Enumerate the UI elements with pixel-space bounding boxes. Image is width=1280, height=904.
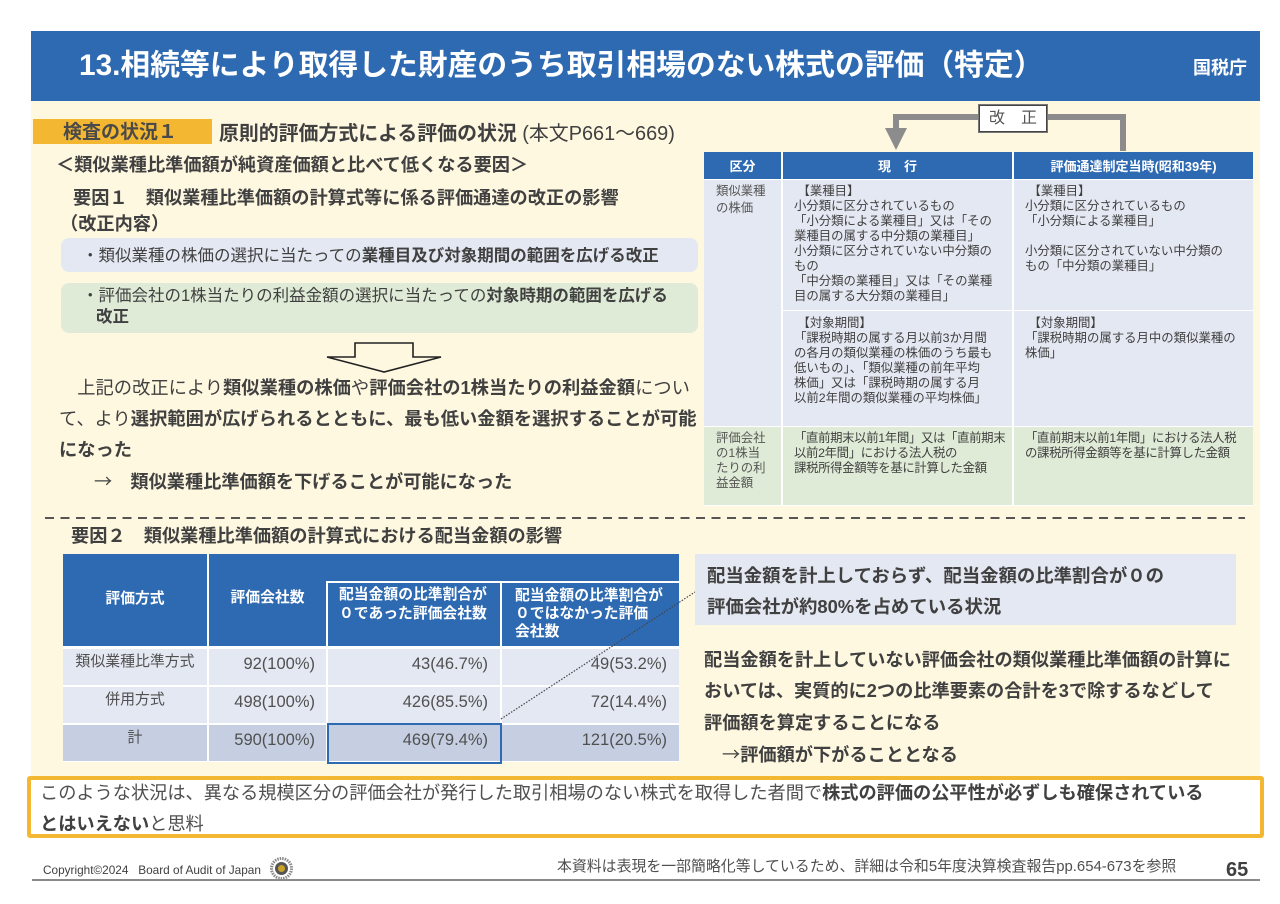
column header: category: 区分 xyxy=(729,159,756,174)
row: similar industry method: 92(100%) xyxy=(243,655,315,673)
explanation text: 評価額を算定することになる xyxy=(704,713,940,733)
row label: profit per share: 評価会社 xyxy=(716,431,766,445)
revision label: 改 正 xyxy=(989,110,1037,127)
column header: at establishment: 評価通達制定当時(昭和39年) xyxy=(1050,159,1217,174)
callout box: 配当金額を計上しておらず、配当金額の比準割合が０の xyxy=(707,565,1164,586)
explanation text: おいては、実質的に2つの比準要素の合計を3で除するなどして xyxy=(704,681,1214,701)
header: company count: 評価会社数 xyxy=(230,590,304,606)
row: total: 469(79.4%) xyxy=(403,731,488,749)
title: 13.相続等により取得した財産のうち取引相場のない株式の評価（特定） xyxy=(79,49,1044,82)
cell: current period: の各月の類似業種の株価のうち最も xyxy=(794,346,992,360)
callout box xyxy=(695,554,1236,625)
row: total: 121(20.5%) xyxy=(582,731,667,749)
header band xyxy=(31,31,1260,101)
cell: former period: 「課税時期の属する月中の類似業種の xyxy=(1025,331,1236,345)
row label: profit per share: 益金額 xyxy=(716,476,753,490)
conclusion result: → 類似業種比準価額を下げることが可能になった xyxy=(94,468,512,494)
conclusion box: このような状況は、異なる規模区分の評価会社が発行した取引相場のない株式を取得した者間で株式の評価の公平性が必ずしも確保されている xyxy=(40,783,1203,803)
row label: profit per share: たりの利 xyxy=(716,461,766,475)
row: total: 計 xyxy=(128,730,142,746)
cell: current profit: 以前2年間」における法人税の xyxy=(794,446,957,460)
explanation text xyxy=(704,650,1231,767)
dotted leader line xyxy=(500,592,695,720)
revision box 2 xyxy=(61,283,698,333)
cell: current industry: もの xyxy=(794,259,819,273)
cell: current period: 株価」又は「課税時期の属する月 xyxy=(794,376,980,390)
header: ratio zero xyxy=(328,583,500,646)
cell: current industry: 目の属する大分類の業種目」 xyxy=(794,289,955,303)
footnote: 本資料は表現を一部簡略化等しているため、詳細は令和5年度決算検査報告pp.654-673を参照 xyxy=(557,859,1176,875)
revision label xyxy=(979,105,1047,132)
factor 2 heading: 要因２ 類似業種比準価額の計算式における配当金額の影響 xyxy=(71,526,562,546)
cell: current industry xyxy=(783,180,1012,310)
row: similar industry method xyxy=(63,649,679,685)
dashed divider xyxy=(45,517,1245,519)
cell: former profit: の課税所得金額等を基に計算した金額 xyxy=(1025,446,1230,460)
header: ratio zero: 配当金額の比準割合が xyxy=(339,587,487,603)
row: combined method: 72(14.4%) xyxy=(591,693,667,711)
column header: current: 現 行 xyxy=(878,159,917,174)
section tag xyxy=(33,119,212,144)
subheading: ＜類似業種比準価額が純資産価額と比べて低くなる要因＞ xyxy=(56,155,528,175)
section tag: 検査の状況１ xyxy=(63,122,177,143)
cell: current period: 【対象期間】 xyxy=(797,316,872,330)
cell: former industry: 「小分類による業種目」 xyxy=(1025,214,1161,228)
row: total xyxy=(63,725,679,761)
cell: current industry: 「小分類による業種目」又は「その xyxy=(794,214,992,228)
column header: current xyxy=(783,152,1012,179)
revision box 1 xyxy=(61,238,698,272)
header: company count xyxy=(209,581,326,646)
cell: current profit: 「直前期末以前1年間」又は「直前期末 xyxy=(794,431,1005,445)
row: combined method: 426(85.5%) xyxy=(403,693,488,711)
column header: category xyxy=(704,152,781,179)
column header: at establishment xyxy=(1014,152,1253,179)
row label: profit per share: の1株当 xyxy=(716,446,760,460)
revision box 1: ・類似業種の株価の選択に当たっての業種目及び対象期間の範囲を広げる改正 xyxy=(82,247,659,265)
cell: former period: 【対象期間】 xyxy=(1028,316,1103,330)
page number: 65 xyxy=(1226,859,1248,881)
explanation text: 配当金額を計上していない評価会社の類似業種比準価額の計算に xyxy=(704,650,1231,670)
header: upper span xyxy=(209,554,679,581)
cell: former industry xyxy=(1014,180,1253,310)
footer rule xyxy=(32,879,1260,881)
conclusion paragraph: になった xyxy=(59,439,132,460)
row: combined method: 併用方式 xyxy=(105,692,165,708)
cell: former industry: もの「中分類の業種目」 xyxy=(1025,259,1161,273)
row: similar industry method: 43(46.7%) xyxy=(412,655,488,673)
header: ratio nonzero xyxy=(502,583,679,646)
cell: current period: 低いもの」、「類似業種の前年平均 xyxy=(794,361,980,375)
cell: former industry: 小分類に区分されているもの xyxy=(1025,199,1186,213)
cell: current industry: 小分類に区分されているもの xyxy=(794,199,955,213)
cell: current period: 「課税時期の属する月以前3か月間 xyxy=(794,331,987,345)
cell: current period xyxy=(783,311,1012,426)
cell: former period: 株価」 xyxy=(1025,346,1062,360)
header: ratio nonzero: 配当金額の比準割合が xyxy=(515,588,663,604)
row label: profit per share xyxy=(704,427,781,505)
cell: former profit xyxy=(1014,427,1253,505)
revision arrow connector xyxy=(885,114,1126,151)
section heading: 原則的評価方式による評価の状況 (本文P661～669) xyxy=(219,123,675,145)
revision box 2: 改正 xyxy=(96,308,129,326)
row: similar industry method: 類似業種比準方式 xyxy=(75,654,195,670)
row label: similar industry stock price: の株価 xyxy=(716,200,753,214)
cell: current industry: 業種目の属する中分類の業種目」 xyxy=(794,229,980,243)
cell: former industry: 【業種目】 xyxy=(1028,184,1090,198)
header: ratio nonzero: 会社数 xyxy=(515,624,559,640)
cell: former profit: 「直前期末以前1年間」における法人税 xyxy=(1025,431,1236,445)
row: total: 590(100%) xyxy=(234,731,315,749)
main panel background xyxy=(31,101,1260,776)
header: ratio zero: ０であった評価会社数 xyxy=(339,606,487,622)
dividend table xyxy=(63,554,679,762)
cell: current profit xyxy=(783,427,1012,505)
copyright: Copyright©2024 Board of Audit of Japan xyxy=(43,863,261,877)
row: combined method xyxy=(63,687,679,723)
conclusion paragraph xyxy=(59,377,696,460)
callout box: 評価会社が約80%を占めている状況 xyxy=(707,596,1001,617)
cell: current industry: 小分類に区分されていない中分類の xyxy=(794,244,992,258)
comparison table xyxy=(704,152,1253,506)
cell: current profit: 課税所得金額等を基に計算した金額 xyxy=(794,461,987,475)
row: similar industry method: 49(53.2%) xyxy=(591,655,667,673)
highlighted cell outline xyxy=(327,723,502,764)
cell: former industry: 小分類に区分されていない中分類の xyxy=(1025,244,1223,258)
revision contents label: （改正内容） xyxy=(60,214,169,234)
conclusion box xyxy=(27,776,1264,838)
cell: current industry: 【業種目】 xyxy=(797,184,859,198)
revision box 2: ・評価会社の1株当たりの利益金額の選択に当たっての対象時期の範囲を広げる xyxy=(82,287,668,305)
agency name: 国税庁 xyxy=(1193,58,1247,78)
hollow down arrow xyxy=(326,342,442,373)
cell: former period xyxy=(1014,311,1253,426)
cell: current industry: 「中分類の業種目」又は「その業種 xyxy=(794,274,992,288)
conclusion box: とはいえないと思料 xyxy=(40,814,204,834)
header: ratio nonzero: ０ではなかった評価 xyxy=(515,606,648,622)
row label: similar industry stock price: 類似業種 xyxy=(716,184,766,198)
row: combined method: 498(100%) xyxy=(234,693,315,711)
icon: emblem xyxy=(270,857,293,879)
header: valuation method xyxy=(63,554,207,646)
explanation text: →評価額が下がることとなる xyxy=(722,741,958,767)
conclusion paragraph: て、より選択範囲が広げられるとともに、最も低い金額を選択することが可能 xyxy=(59,408,696,429)
cell: current period: 以前2年間の類似業種の平均株価」 xyxy=(794,391,987,405)
conclusion paragraph: 上記の改正により類似業種の株価や評価会社の1株当たりの利益金額につい xyxy=(77,377,690,398)
row label: similar industry stock price xyxy=(704,180,781,426)
header: valuation method: 評価方式 xyxy=(105,591,165,607)
factor 1 heading: 要因１ 類似業種比準価額の計算式等に係る評価通達の改正の影響 xyxy=(73,188,619,208)
